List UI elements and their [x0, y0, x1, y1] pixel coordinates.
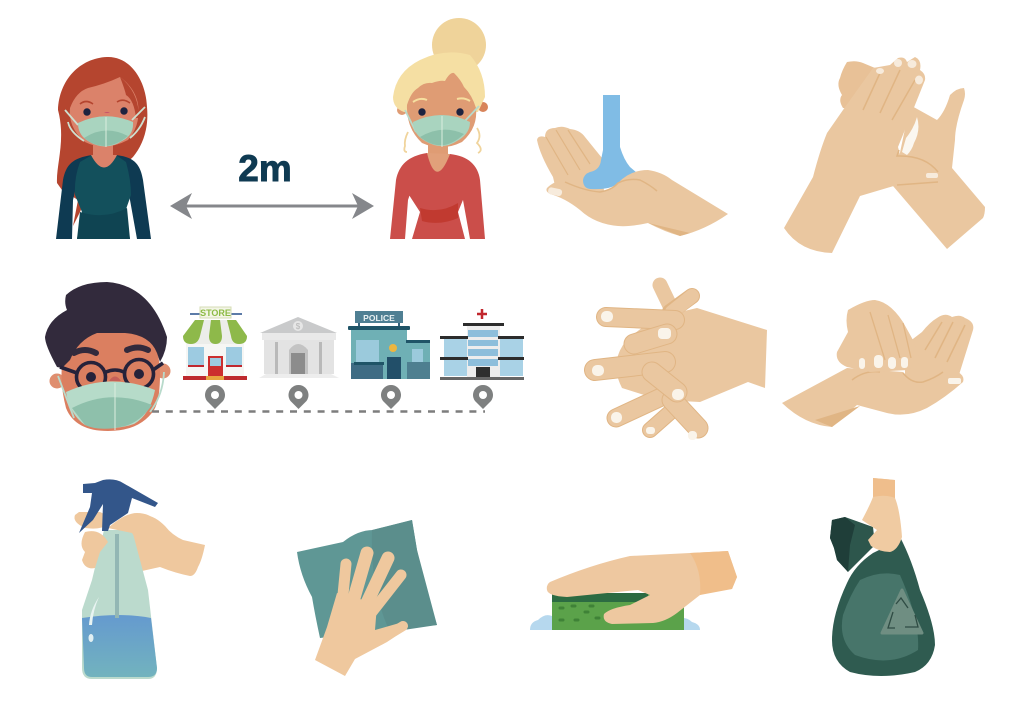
location pin 1 [205, 385, 225, 409]
location pin 3 [381, 385, 401, 409]
icon: police station [348, 311, 430, 379]
recycling symbol [882, 590, 922, 633]
icon: rubbing palm with fingers [782, 300, 973, 427]
hand on sponge [547, 551, 737, 624]
front hand [784, 57, 942, 253]
heading: 2m distance label: 2m [238, 148, 292, 189]
bottle highlight [89, 597, 99, 625]
hand [315, 553, 407, 676]
location pin 2 [288, 385, 308, 409]
bank dollar sign: $ [296, 322, 301, 331]
icon: hands rubbing back of hand [784, 57, 985, 253]
icon: hand holding garbage bag [830, 478, 935, 676]
bag body [832, 537, 935, 676]
hand behind bottle [120, 515, 205, 576]
woman 1 torso [56, 155, 151, 239]
panel: man with glasses and mask [45, 282, 170, 431]
store sign text: STORE [200, 308, 231, 318]
woman 2 torso [390, 153, 485, 239]
location pin 4 [473, 385, 493, 409]
icon: store [183, 307, 247, 380]
icon: interlaced fingers [592, 285, 767, 440]
arrow: two-metre distance [170, 193, 374, 219]
hand holding bag [862, 478, 902, 552]
cloth [297, 520, 437, 638]
foam [530, 615, 700, 630]
soap foam [902, 117, 918, 155]
icon: spray bottle held by hand [74, 479, 205, 679]
police sign text: POLICE [363, 313, 395, 323]
bottle body [82, 530, 157, 679]
woman 2 curls [404, 128, 481, 153]
man mask [58, 372, 164, 430]
icon: hospital [440, 308, 524, 380]
icon: bank [259, 317, 339, 378]
icon: hand scrubbing with sponge [530, 551, 737, 630]
woman 1 mask [65, 107, 145, 147]
man hair [45, 282, 167, 368]
bag knot [830, 517, 875, 572]
woman 2 mask [405, 106, 479, 147]
hand over bottle neck [108, 513, 157, 545]
sponge [552, 594, 684, 630]
panel: woman with red hair [56, 57, 151, 239]
icon: hand wiping with cloth [297, 520, 437, 676]
route: dashed line with location pins [152, 385, 493, 412]
fingernails [592, 311, 697, 440]
man glasses [60, 360, 163, 392]
trigger nozzle [79, 479, 158, 533]
back hand [838, 61, 985, 249]
soap stream [583, 95, 643, 189]
panel: woman with blonde hair [390, 18, 488, 239]
fist fingers [82, 531, 108, 568]
icon: hand receiving soap [537, 95, 728, 236]
